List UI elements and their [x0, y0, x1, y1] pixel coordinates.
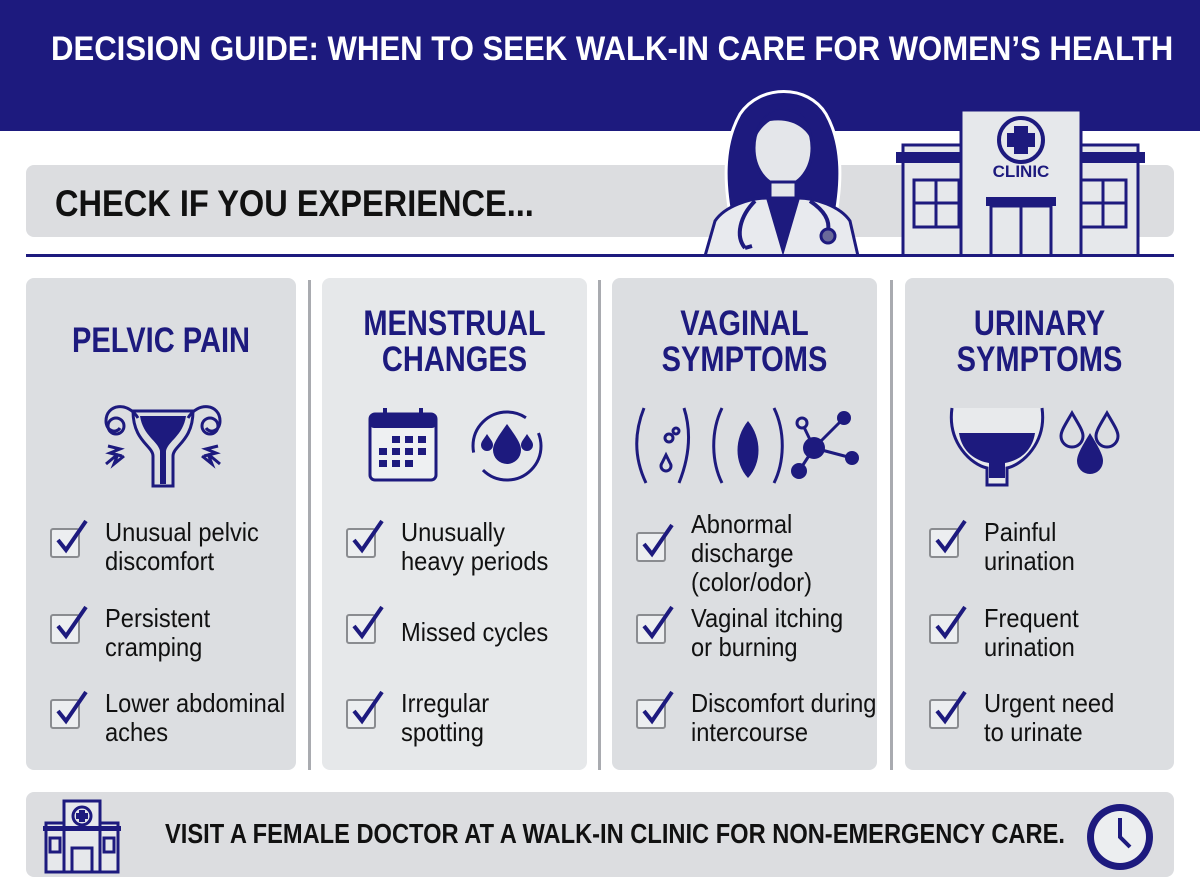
- heading: VAGINAL: [680, 304, 809, 343]
- checklist: [346, 517, 548, 576]
- icon: clock: [1087, 804, 1153, 870]
- heading: MENSTRUAL: [363, 304, 546, 343]
- panel: vaginal symptoms: [612, 278, 877, 770]
- icon: uterus: [104, 405, 222, 488]
- heading: [957, 304, 1122, 379]
- icon: vaginal symptom icons: [635, 407, 859, 484]
- heading: SYMPTOMS: [662, 340, 827, 379]
- heading: URINARY: [974, 304, 1105, 343]
- heading: SYMPTOMS: [957, 340, 1122, 379]
- checklist: [50, 517, 259, 576]
- panel: vaginal symptoms: Discomfort during: [691, 688, 876, 718]
- panel: menstrual changes: [322, 278, 587, 770]
- title: DECISION GUIDE: WHEN TO SEEK WALK-IN CARE FOR WOMEN’S HEALTH: [51, 30, 1173, 68]
- panel: urinary symptoms: [905, 278, 1174, 770]
- panel: urinary symptoms: Frequent: [984, 603, 1079, 633]
- icon: female doctor: [704, 90, 859, 254]
- panel: urinary symptoms: urination: [984, 632, 1075, 662]
- icon: clinic building: [896, 112, 1145, 254]
- panel: urinary symptoms: Urgent need: [984, 688, 1114, 718]
- panel: urinary symptoms: urination: [984, 546, 1075, 576]
- footer bar: [26, 792, 1174, 877]
- panel: vaginal symptoms: Abnormal: [691, 509, 792, 539]
- icon: small clinic: [43, 800, 121, 874]
- panel: menstrual changes: Missed cycles: [401, 617, 548, 647]
- panel: vaginal symptoms: (color/odor): [691, 567, 812, 597]
- heading: PELVIC PAIN: [72, 321, 250, 360]
- panel: pelvic pain: aches: [105, 717, 168, 747]
- check bar: [26, 165, 1174, 237]
- icon: bladder and drops: [950, 408, 1120, 486]
- panel: urinary symptoms: to urinate: [984, 717, 1083, 747]
- checklist: [636, 509, 812, 597]
- panel: vaginal symptoms: discharge: [691, 538, 794, 568]
- panel: menstrual changes: heavy periods: [401, 546, 548, 576]
- footer message: VISIT A FEMALE DOCTOR AT A WALK-IN CLINIC FOR NON-EMERGENCY CARE.: [165, 818, 1065, 849]
- icon: clinic building: CLINIC: [993, 162, 1049, 181]
- panel: pelvic pain: [26, 278, 296, 770]
- panel: menstrual changes: Unusually: [401, 517, 505, 547]
- heading: [363, 304, 546, 379]
- panel: menstrual changes: Irregular: [401, 688, 489, 718]
- panel: pelvic pain: Lower abdominal: [105, 688, 285, 718]
- check heading: CHECK IF YOU EXPERIENCE...: [55, 183, 534, 224]
- icon: calendar and drops: [368, 408, 542, 482]
- header band: [0, 0, 1200, 131]
- heading: [662, 304, 827, 379]
- panel: vaginal symptoms: intercourse: [691, 717, 808, 747]
- panel: menstrual changes: spotting: [401, 717, 484, 747]
- panel: pelvic pain: discomfort: [105, 546, 214, 576]
- heading: CHANGES: [382, 340, 527, 379]
- panel: pelvic pain: cramping: [105, 632, 202, 662]
- panel: urinary symptoms: Painful: [984, 517, 1056, 547]
- panel: pelvic pain: Persistent: [105, 603, 210, 633]
- panel: pelvic pain: Unusual pelvic: [105, 517, 259, 547]
- panel: vaginal symptoms: or burning: [691, 632, 798, 662]
- panel: vaginal symptoms: Vaginal itching: [691, 603, 843, 633]
- checklist: [929, 517, 1075, 576]
